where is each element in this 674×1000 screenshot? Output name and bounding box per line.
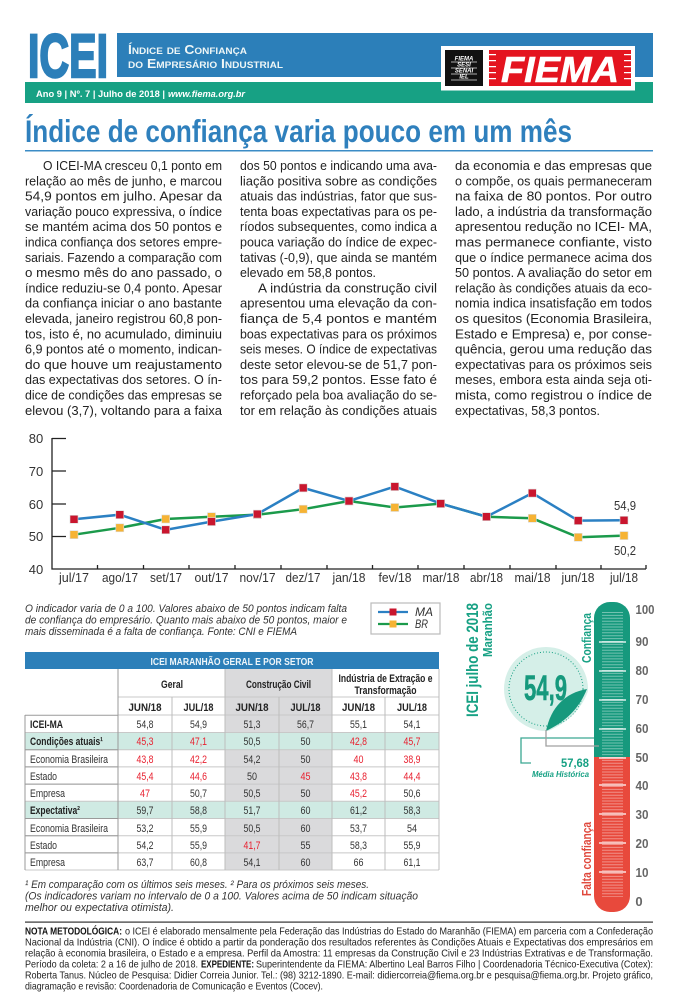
text column 2: boas expectativas para os próximos — [240, 326, 437, 341]
text column 3: os quesitos (Economia Brasileira, — [455, 311, 652, 326]
column headers — [128, 673, 432, 714]
text column 3: expectativas, 58,3 pontos. — [455, 403, 600, 418]
data labels: 50,2 — [614, 544, 636, 558]
text column 1: do que houve um reajustamento — [25, 357, 222, 372]
thermometer tube — [594, 602, 630, 912]
line chart: MA vs BR: 50 — [29, 529, 43, 544]
row: Estado (expectativa): 58,3 — [350, 840, 367, 852]
chart caption: mais disseminada é a falta de confiança. Fonte: CNI e FIEMA — [25, 626, 297, 638]
header subtitle: Índice de Confiança — [128, 42, 248, 57]
line chart: MA vs BR: set/17 — [150, 571, 182, 585]
scale numbers: 30 — [636, 807, 648, 822]
issue line: Ano 9 | Nº. 7 | Julho de 2018 | — [36, 89, 165, 100]
line chart: MA vs BR: 40 — [29, 562, 43, 577]
row: Expectativa: 60 — [300, 805, 310, 817]
row: Empresa (expectativa): 60,8 — [190, 857, 207, 869]
row: Condições atuais: 47,1 — [190, 736, 207, 748]
row: Expectativa: 58,3 — [404, 805, 420, 817]
row: ICEI-MA: 51,3 — [244, 719, 260, 731]
scale numbers: 50 — [636, 750, 648, 765]
row: ICEI-MA — [30, 719, 420, 731]
chart caption: O indicador varia de 0 a 100. Valores abaixo de 50 pontos indicam falta — [25, 603, 347, 615]
row: Economia Brasileira: 38,9 — [404, 754, 420, 766]
row: Estado (expectativa): 41,7 — [244, 840, 260, 852]
row: Economia Brasileira (expectativa): Economia Brasileira — [30, 823, 109, 835]
chart caption — [25, 603, 347, 638]
logo: ICEI: ICEI — [28, 22, 108, 90]
row: ICEI-MA: ICEI-MA — [30, 719, 63, 731]
text column 1: se mantém acima dos 50 pontos e — [25, 219, 222, 234]
text column 1: indica confiança dos setores empre- — [25, 234, 222, 250]
row: Economia Brasileira (expectativa): 54 — [407, 823, 417, 835]
line chart: MA vs BR: jan/18 — [332, 571, 366, 585]
row: Economia Brasileira (expectativa): 53,2 — [136, 823, 154, 835]
row: Estado (expectativa): 54,2 — [136, 840, 154, 852]
table footnote: (Os indicadores variam no intervalo de 0 a 100. Valores acima de 50 indicam situação — [25, 890, 418, 902]
zone labels: Falta confiança — [579, 821, 594, 896]
column headers: JUL/18 — [184, 702, 214, 714]
row: Expectativa — [30, 805, 420, 817]
text column 3: mista, como registrou o índice de — [455, 388, 652, 402]
scale numbers: 20 — [636, 836, 648, 851]
text column 2: tos para 59,2 pontos. Esse fato é — [240, 372, 437, 387]
column headers: Transformação — [354, 685, 417, 697]
row: Estado (expectativa): 55,9 — [190, 840, 207, 852]
column headers: JUN/18 — [128, 702, 162, 714]
row: ICEI-MA: 54,8 — [136, 719, 154, 731]
text column 3: quência, gerou uma redução das — [455, 342, 652, 357]
text column 3: que o índice permanece acima dos — [455, 250, 652, 265]
row: Empresa: 45,2 — [350, 788, 367, 800]
column headers: JUN/18 — [236, 702, 268, 714]
row: Empresa (expectativa): 61,1 — [404, 857, 420, 869]
table: ICEI Maranhão geral e por setor — [25, 652, 439, 870]
header subtitle: do Empresário Industrial — [128, 57, 284, 71]
line chart: MA vs BR: mai/18 — [514, 571, 551, 585]
row: Empresa: Empresa — [30, 788, 66, 800]
footer: methodological note — [25, 922, 653, 992]
scale numbers: 0 — [635, 894, 643, 909]
series: MA — [70, 483, 628, 534]
text column 1: O ICEI-MA cresceu 0,1 ponto em — [43, 158, 222, 173]
title: Índice de confiança varia pouco em um mês — [25, 113, 572, 149]
footer: methodological note: EXPEDIENTE: — [201, 960, 254, 970]
line chart: MA vs BR: nov/17 — [240, 571, 276, 585]
row: Economia Brasileira: 42,2 — [190, 754, 207, 766]
table footnote: ¹ Em comparação com os últimos seis meses. ² Para os próximos seis meses. — [25, 879, 369, 891]
text column 1: índice reduziu-se 0,4 ponto. Apesar — [25, 280, 223, 295]
header subtitle — [128, 42, 284, 71]
line chart: MA vs BR — [29, 431, 646, 585]
row: Estado: 50 — [247, 771, 257, 783]
table footnote — [25, 879, 418, 914]
text column 1: relação ao mês de junho, e marcou — [25, 173, 222, 188]
row: Empresa (expectativa): 60 — [300, 857, 310, 869]
row: Condições atuais: 50 — [300, 736, 310, 748]
data labels — [614, 499, 636, 558]
row: Empresa (expectativa): Empresa — [30, 857, 66, 869]
header banner — [25, 22, 653, 103]
row: Empresa: 50,5 — [244, 788, 260, 800]
issue line — [36, 89, 246, 100]
row: ICEI-MA: 56,7 — [297, 719, 314, 731]
scale numbers: 80 — [636, 663, 648, 678]
text column 1: 6,9 pontos até o momento, indican- — [25, 342, 222, 357]
row: Empresa — [30, 788, 420, 800]
text column 2: dos 50 pontos e indicando uma ava- — [240, 158, 437, 173]
row: Estado: 43,8 — [350, 771, 367, 783]
line chart: MA vs BR: 70 — [29, 464, 43, 479]
row: ICEI-MA: 54,1 — [404, 719, 420, 731]
row: Economia Brasileira (expectativa): 55,9 — [190, 823, 207, 835]
row: Empresa: 50,7 — [190, 788, 207, 800]
column headers: Construção Civil — [246, 679, 311, 691]
row: Estado (expectativa): 55 — [300, 840, 310, 852]
zone labels — [579, 612, 594, 896]
text column 2: tor em relação às condições atuais — [240, 403, 437, 418]
logo: FIEMA: FIEMA — [455, 56, 473, 62]
text column 3: expectativas para os próximos seis — [455, 357, 652, 372]
row: Economia Brasileira: 50 — [300, 754, 310, 766]
footer: methodological note: NOTA METODOLÓGICA: — [25, 924, 122, 938]
text column 3: 50 pontos. A avaliação do setor em — [455, 265, 652, 280]
footer: methodological note: diagramação e revisão: Coordenadoria de Comunicação e Eventos (Cocev). — [25, 982, 323, 992]
row: Expectativa: 61,2 — [350, 805, 367, 817]
line chart: MA vs BR: jul/17 — [58, 571, 89, 585]
row: Condições atuais: 42,8 — [350, 736, 367, 748]
table title bar: ICEI MARANHÃO GERAL E POR SETOR — [150, 655, 314, 668]
logo: FIEMA: IEL — [459, 74, 469, 80]
text column 2: seis meses. O índice de expectativas — [240, 342, 437, 357]
line chart: MA vs BR: ago/17 — [102, 571, 138, 585]
scale numbers: 70 — [636, 692, 648, 707]
text column 1: 54,9 pontos em julho. Apesar da — [25, 189, 223, 204]
column headers: JUN/18 — [342, 702, 375, 714]
text column 2: elevado em 58,8 pontos. — [240, 265, 376, 280]
line chart: MA vs BR: dez/17 — [286, 571, 321, 585]
line chart: MA vs BR: mar/18 — [422, 571, 460, 585]
line chart: MA vs BR: jun/18 — [561, 571, 595, 585]
footer: methodological note: Período da coleta: 2 a 16 de julho de 2018. — [25, 960, 198, 970]
text column 1: variação pouco expressiva, o índice — [25, 204, 222, 219]
historical average: Média Histórica — [532, 770, 590, 779]
row: Empresa (expectativa): 63,7 — [136, 857, 154, 869]
chart legend: BR — [415, 617, 428, 631]
text column 1: elevada, janeiro registrou 60,8 pon- — [25, 311, 222, 326]
row: Economia Brasileira: Economia Brasileira — [30, 754, 109, 766]
column headers: Indústria de Extração e — [338, 673, 432, 685]
text column 2: tenta boas expectativas para os pe- — [240, 204, 437, 219]
row: Empresa: 50 — [300, 788, 310, 800]
row: Empresa (expectativa): 54,1 — [244, 857, 260, 869]
issue line: www.fiema.org.br — [168, 89, 246, 100]
text column 1: elevou (3,7), voltando para a faixa — [25, 403, 223, 418]
row: Economia Brasileira (expectativa): 60 — [300, 823, 310, 835]
row: Empresa (expectativa) — [30, 857, 420, 869]
text column 1 — [25, 158, 223, 418]
row: Economia Brasileira (expectativa) — [30, 823, 417, 835]
scale numbers: 60 — [636, 721, 648, 736]
text column 3 — [455, 158, 652, 418]
rotated heading: ICEI julho de 2018 — [463, 603, 482, 717]
rotated heading: Maranhão — [480, 603, 495, 657]
logo: FIEMA — [441, 46, 635, 90]
pointer lines — [521, 730, 599, 763]
row: ICEI-MA: 55,1 — [350, 719, 367, 731]
row: Condições atuais: 45,3 — [136, 736, 154, 748]
text column 1: sariais. Fazendo a comparação com — [25, 250, 222, 265]
text column 2: fiança de 5,4 pontos e mantém — [240, 311, 437, 326]
line chart: MA vs BR: fev/18 — [378, 571, 412, 585]
row: Condições atuais: 45,7 — [404, 736, 420, 748]
row: Expectativa: 58,8 — [190, 805, 207, 817]
text column 3: Estado e Empresa) e, por conse- — [455, 326, 652, 341]
chart legend: MA — [415, 605, 433, 619]
text column 2: pouca variação do índice de expec- — [240, 234, 437, 250]
row: Estado (expectativa): 55,9 — [404, 840, 420, 852]
rotated heading — [463, 603, 495, 717]
table title bar — [25, 652, 439, 669]
row: Economia Brasileira (expectativa): 53,7 — [350, 823, 367, 835]
logo: FIEMA: SENAI — [455, 68, 473, 74]
row: Empresa: 50,6 — [404, 788, 420, 800]
scale numbers: 40 — [636, 778, 648, 793]
zone labels: Confiança — [579, 612, 594, 663]
row: Expectativa: 51,7 — [244, 805, 260, 817]
row: Economia Brasileira: 40 — [354, 754, 364, 766]
row: Condições atuais — [30, 736, 420, 748]
row: Estado (expectativa) — [30, 840, 420, 852]
line chart: MA vs BR: jul/18 — [609, 571, 638, 585]
text column 1: dice de condições das empresas se — [25, 388, 222, 402]
text column 2: liação positiva sobre as condições — [240, 173, 437, 188]
chart legend — [371, 603, 440, 634]
text column 3: nomia indica insatisfação em todos — [455, 296, 652, 311]
column headers: Geral — [161, 679, 183, 691]
text column 3: na faixa de 80 pontos. Por outro — [455, 189, 652, 204]
row: Economia Brasileira — [30, 754, 420, 766]
row: Economia Brasileira: 54,2 — [244, 754, 260, 766]
column headers: JUL/18 — [397, 702, 427, 714]
row: Economia Brasileira: 43,8 — [136, 754, 154, 766]
line chart: MA vs BR: 60 — [29, 497, 43, 512]
column headers: JUL/18 — [290, 702, 320, 714]
text column 2: A indústria da construção civil — [258, 280, 437, 295]
text column 2: deste setor elevou-se de 51,7 pon- — [240, 357, 437, 372]
row: Condições atuais: Condições atuais¹ — [30, 736, 103, 748]
row: Estado: Estado — [30, 771, 57, 783]
chart caption: de confiança do empresário. Quanto mais abaixo de 50 pontos, maior e — [25, 614, 347, 626]
data labels: 54,9 — [614, 499, 636, 513]
historical average — [532, 756, 590, 779]
row: Estado: 44,4 — [404, 771, 420, 783]
row: Condições atuais: 50,5 — [244, 736, 260, 748]
scale numbers: 100 — [636, 602, 654, 617]
text column 2: tativas (-0,9), que ainda se mantém — [240, 250, 437, 265]
row: Economia Brasileira (expectativa): 50,5 — [244, 823, 260, 835]
text column 1: da confiança iniciar o ano bastante — [25, 296, 222, 311]
row: Estado: 45,4 — [136, 771, 154, 783]
table footnote: melhor ou expectativa otimista). — [25, 902, 174, 914]
text column 1: das expectativas dos setores. O ín- — [25, 372, 222, 387]
text column 3: relação às condições atuais da eco- — [455, 280, 652, 295]
value badge 54,9: 54,9 — [524, 669, 567, 708]
row: Estado: 44,6 — [190, 771, 207, 783]
text column 2: atuais das indústrias, fator que sus- — [240, 189, 437, 204]
row: Expectativa: 59,7 — [136, 805, 154, 817]
scale numbers — [635, 602, 654, 909]
row: Empresa: 47 — [140, 788, 150, 800]
series: BR — [70, 497, 628, 541]
text column 3: o compõe, os quais permaneceram — [455, 173, 652, 188]
text column 2: ríodos subsequentes, como indica a — [240, 219, 438, 234]
scale numbers: 90 — [636, 634, 648, 649]
text column 1: o mesmo mês do ano passado, o — [25, 265, 222, 280]
text column 3: meses, embora esta ainda seja oti- — [455, 372, 652, 387]
text column 1: tos, isto é, no acumulado, diminuiu — [25, 326, 222, 341]
line chart: MA vs BR: 80 — [29, 431, 43, 446]
row: Estado — [30, 771, 420, 783]
row: Estado (expectativa): Estado — [30, 840, 57, 852]
text column 2 — [240, 158, 438, 418]
value badge 54,9 — [504, 647, 594, 738]
row: Expectativa: Expectativa² — [30, 805, 80, 817]
row: ICEI-MA: 54,9 — [190, 719, 207, 731]
thermometer infographic — [463, 602, 654, 912]
text column 3: mas permanece confiante, visto — [455, 234, 652, 250]
historical average: 57,68 — [561, 756, 589, 770]
line chart: MA vs BR: out/17 — [194, 571, 229, 585]
text column 2: reforçado pela boa avaliação do se- — [240, 388, 437, 402]
text column 3: apresentou redução no ICEI- MA, — [455, 219, 652, 234]
text column 2: apresentou uma elevação da con- — [240, 296, 437, 311]
row: Empresa (expectativa): 66 — [354, 857, 364, 869]
text column 3: da economia e das empresas que — [455, 158, 652, 173]
row: Estado: 45 — [300, 771, 310, 783]
text column 3: lado, a indústria da transformação — [455, 204, 652, 219]
scale numbers: 10 — [636, 865, 648, 880]
line chart: MA vs BR: abr/18 — [470, 571, 503, 585]
logo: FIEMA: SESI — [457, 62, 471, 68]
logo: FIEMA: FIEMA — [501, 49, 619, 90]
